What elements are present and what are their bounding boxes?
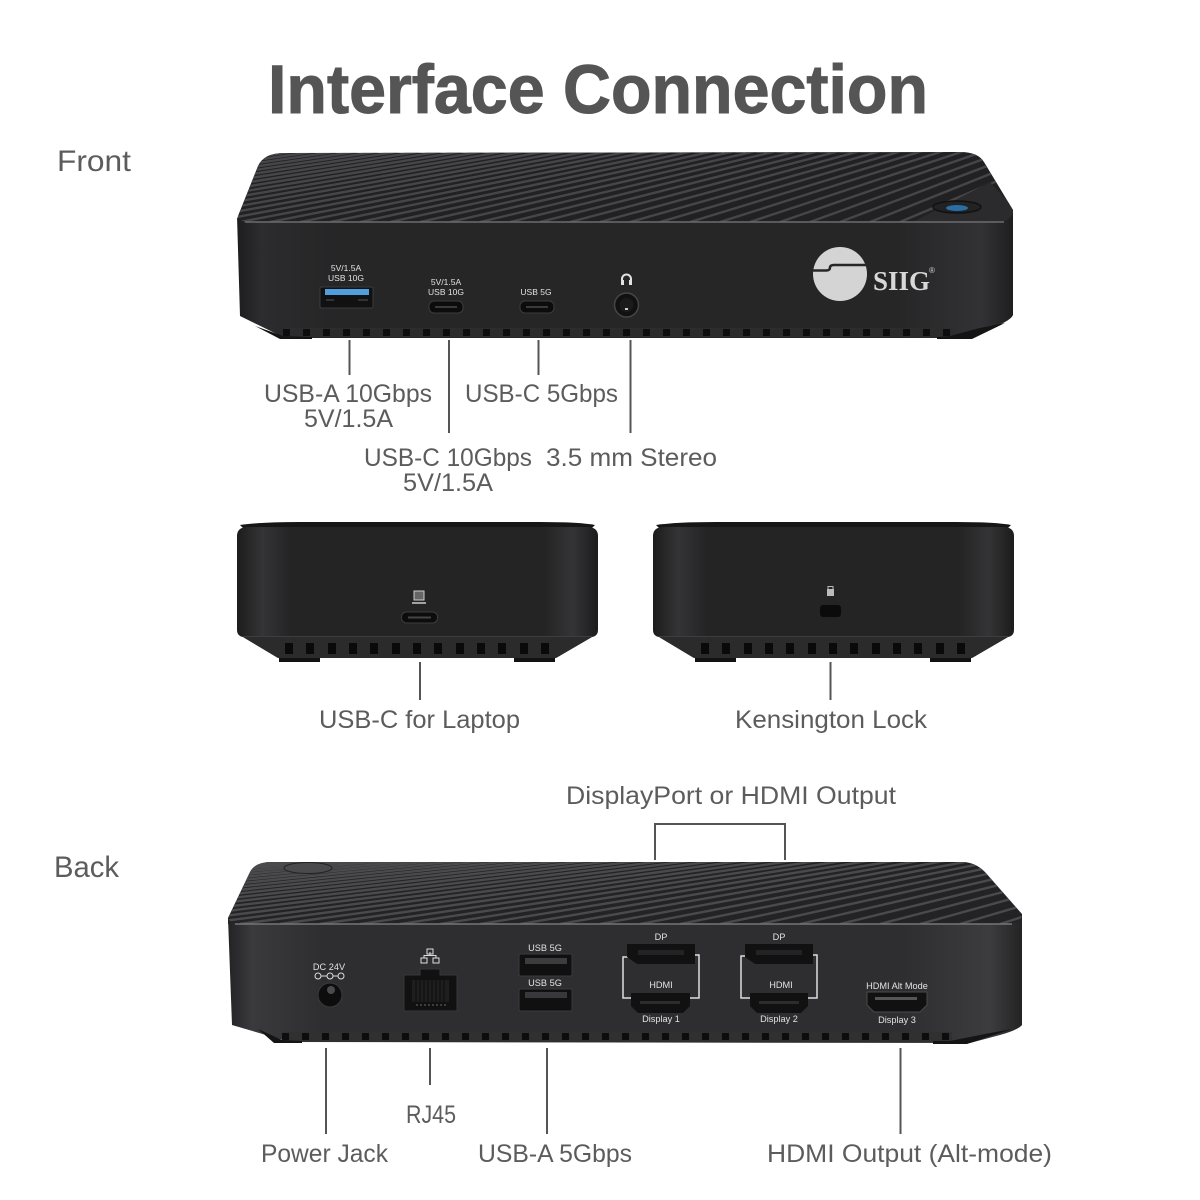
ports: Display 2: HDMI: [769, 980, 793, 990]
port: USB-A 10G: [320, 263, 373, 308]
port: USB-C for laptop: [402, 612, 438, 623]
label: Power Jack: Power Jack: [261, 1140, 388, 1168]
port: USB 5G upper: USB 5G: [528, 943, 562, 953]
port: USB-C 10G: 5V/1.5A: [431, 277, 461, 287]
SIIG logo: [812, 247, 935, 301]
leader lines: back: [326, 1048, 900, 1134]
port: Display 3 HDMI Alt Mode: HDMI Alt Mode: [866, 981, 928, 991]
port: USB 5G lower: [519, 978, 572, 1011]
port: USB-C 10G: USB 10G: [428, 287, 464, 297]
port: USB-C 5G: [520, 287, 554, 313]
label: Kensington Lock: Kensington Lock: [735, 706, 928, 734]
label: USB-C 10Gbps: USB-C 10Gbps: [364, 444, 532, 472]
port: DC 24V: DC 24V: [313, 962, 346, 972]
port: RJ45: [404, 949, 457, 1011]
device: back view: [228, 862, 1022, 1044]
device: right side view: [653, 522, 1014, 662]
heading: Front: Front: [57, 145, 132, 178]
port: USB 5G lower: USB 5G: [528, 978, 562, 988]
label: USB-C for Laptop: USB-C for Laptop: [319, 706, 520, 734]
ports: Display 2: Display 2: [760, 1014, 798, 1024]
port: USB-C 10G: [428, 277, 464, 313]
leader lines: sides: [420, 662, 830, 700]
plain corner around the button: [916, 182, 1013, 221]
feet: [258, 1029, 1012, 1044]
bracket: DisplayPort or HDMI: [655, 824, 785, 860]
feet: [255, 323, 1005, 339]
side vents: [285, 643, 549, 654]
label: USB-C 10Gbps: [364, 444, 532, 497]
device front face: [237, 210, 1013, 338]
label: USB-A 10Gbps: [264, 380, 432, 433]
ports: Display 1: HDMI: [649, 980, 673, 990]
label: USB-C 10Gbps: 5V/1.5A: [403, 469, 493, 497]
device rear face: [228, 914, 1022, 1043]
power button, rear: [284, 862, 332, 874]
bottom vents: [283, 328, 953, 337]
label: DisplayPort or HDMI Output: DisplayPort or HDMI Output: [566, 782, 896, 810]
label: USB-A 5Gbps: USB-A 5Gbps: [478, 1140, 632, 1168]
ports: Display 1: [623, 932, 699, 1024]
laptop icon: [412, 591, 426, 603]
label: 3.5 mm Stereo: 3.5 mm Stereo: [546, 444, 717, 472]
port: USB-A 10G: 5V/1.5A: [331, 263, 361, 273]
ports: Display 2: [741, 932, 817, 1024]
port: DC 24V: [313, 962, 346, 1007]
ports: Display 1: DP: [655, 932, 667, 942]
label: HDMI Output (Alt-mode): HDMI Output (Alt-mode): [767, 1140, 1052, 1168]
device: left side view: [237, 522, 598, 662]
port: Kensington slot: [820, 605, 841, 617]
SIIG logo: SIIG: [873, 266, 930, 296]
side vents: [701, 643, 965, 654]
heading: Back: Back: [54, 851, 120, 884]
label: USB-A 10Gbps: 5V/1.5A: [304, 405, 393, 433]
power button: [933, 201, 981, 213]
bottom vents: [282, 1032, 952, 1041]
label: RJ45: RJ45: [406, 1101, 456, 1129]
ports: Display 1: Display 1: [642, 1014, 680, 1024]
device: front view: [237, 152, 1013, 339]
port: USB-C 5G: USB 5G: [520, 287, 552, 297]
lock icon: [827, 586, 834, 596]
port: 3.5 mm audio jack: [614, 274, 638, 317]
label: USB-A 10Gbps: USB-A 10Gbps: [264, 380, 432, 408]
port: USB 5G upper: [519, 943, 572, 976]
device top with ridges: [238, 152, 1013, 222]
label: USB-C 5Gbps: USB-C 5Gbps: [465, 380, 618, 408]
device top with ridges: [228, 862, 1022, 924]
title: Interface Connection: [268, 51, 928, 128]
SIIG logo: ®: [929, 266, 935, 275]
port: USB-A 10G: USB 10G: [328, 273, 364, 283]
leader lines: front: [350, 340, 630, 433]
port: Display 3 HDMI Alt Mode: Display 3: [878, 1015, 916, 1025]
port: Display 3 HDMI Alt Mode: [866, 981, 928, 1025]
ports: Display 2: DP: [773, 932, 785, 942]
feet: [279, 658, 555, 662]
feet: [695, 658, 971, 662]
